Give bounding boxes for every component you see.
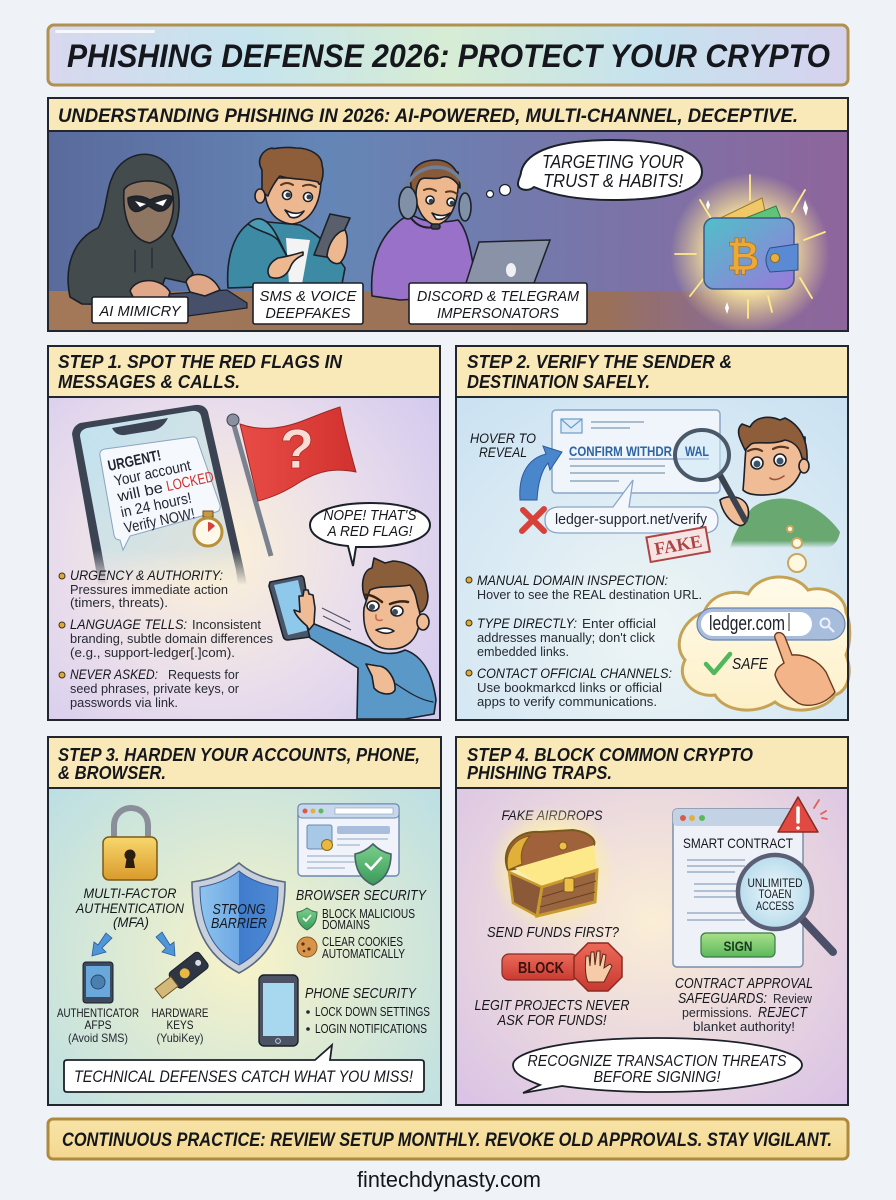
bullet: contact official channels: Use bookmarkcd links or official — [477, 680, 662, 695]
text: multi-factor authentication: AUTHENTICATION — [75, 900, 185, 916]
arrow: to hardware keys — [156, 932, 175, 956]
caption: hover to reveal: REVEAL — [479, 444, 527, 460]
speech bubble: recognize transaction threats: RECOGNIZE TRANSACTION THREATS — [528, 1053, 787, 1070]
text: multi-factor authentication: (MFA) — [113, 914, 149, 930]
icon: warning triangle — [778, 797, 827, 832]
panel heading: step 1: MESSAGES & CALLS. — [58, 372, 240, 392]
bullet: language tells: (e.g., support-ledger[.]com). — [70, 645, 235, 660]
hacker hands on keyboard — [130, 274, 220, 299]
icon: red flag with question mark — [227, 407, 356, 556]
icon: magnifying glass over contract: UNLIMITED — [748, 876, 803, 890]
message bubble on phone — [100, 437, 222, 550]
title banner: PHISHING DEFENSE 2026: PROTECT YOUR CRYPTO — [67, 38, 830, 74]
bullet: contact official channels — [466, 666, 672, 709]
message bubble on phone: in 24 hours! — [119, 490, 193, 521]
icon: strong barrier shield — [192, 863, 285, 973]
title banner — [48, 25, 848, 85]
icon: secure browser window — [298, 804, 399, 885]
email card — [552, 410, 720, 493]
text: browser security — [296, 887, 427, 961]
text: contract approval safeguards: blanket authority! — [693, 1019, 795, 1034]
text: contract approval safeguards: REJECT — [758, 1005, 808, 1021]
email card: CONFIRM WITHDR — [569, 443, 672, 459]
bullet: type directly: TYPE DIRECTLY: — [477, 616, 577, 631]
icon: smartphone — [259, 975, 298, 1046]
icon: gold padlock — [103, 808, 157, 880]
callout: technical defenses — [64, 1045, 424, 1092]
bullet: language tells: branding, subtle domain differences — [70, 631, 273, 646]
bullet: never asked — [59, 667, 240, 710]
message bubble on phone: LOCKED — [165, 469, 215, 495]
character: man blocking phone — [269, 558, 436, 719]
panel: step 3 — [48, 737, 441, 1105]
motion lines — [322, 608, 351, 630]
speech bubble: targeting your trust: TRUST & HABITS! — [543, 171, 683, 191]
panel heading: step 4: STEP 4. BLOCK COMMON CRYPTO — [467, 745, 753, 765]
panel: step 4 — [456, 737, 848, 1105]
character: young man with phone — [228, 147, 350, 288]
bullet: manual domain inspection — [466, 573, 702, 602]
bullet: type directly — [466, 616, 656, 659]
icon: magnifying glass over contract: ACCESS — [756, 899, 794, 913]
text: contract approval safeguards — [675, 976, 813, 1034]
text: browser security: DOMAINS — [322, 918, 370, 932]
label: SMS and voice deepfakes — [253, 283, 363, 324]
caption: legit projects never ask: LEGIT PROJECTS NEVER — [474, 998, 630, 1014]
text: browser security: AUTOMATICALLY — [322, 947, 406, 961]
bullet: urgency and authority: Pressures immediate action — [70, 582, 228, 597]
text: multi-factor authentication — [75, 885, 185, 930]
message bubble on phone: URGENT! — [106, 447, 163, 475]
bullet: language tells: Inconsistent — [192, 617, 261, 632]
icon: block button with stop sign: BLOCK — [518, 960, 564, 977]
icon: magnifying glass: WAL — [685, 443, 709, 459]
icon: phone with urgent message — [72, 404, 246, 584]
text: contract approval safeguards: CONTRACT APPROVAL — [675, 976, 813, 992]
label: Discord and Telegram impersonators — [409, 283, 587, 324]
text: authenticator apps: (Avoid SMS) — [68, 1031, 128, 1045]
icon: glowing crypto wallet: ₿ — [727, 235, 759, 279]
text: phone security: LOCK DOWN SETTINGS — [315, 1005, 430, 1019]
laptop — [462, 240, 550, 289]
panel heading: step 4 — [456, 737, 848, 788]
icon: block button with stop sign — [502, 943, 622, 991]
message bubble on phone: Your account — [113, 457, 193, 490]
panel heading: understanding phishing: UNDERSTANDING PHISHING IN 2026: AI-POWERED, MULTI-CHANNEL, DECEPTIVE. — [58, 106, 798, 127]
panel heading: step 4: PHISHING TRAPS. — [467, 763, 612, 783]
text: authenticator apps: AUTHENTICATOR — [57, 1006, 139, 1020]
smart contract window — [673, 809, 803, 967]
character: man with magnifying glass — [720, 417, 840, 548]
icon: glowing crypto wallet — [670, 173, 830, 333]
text: browser security: BLOCK MALICIOUS — [322, 907, 415, 921]
thought cloud: safe URL — [679, 577, 850, 710]
text: multi-factor authentication: MULTI-FACTOR — [84, 885, 176, 901]
bullet: manual domain inspection: MANUAL DOMAIN INSPECTION: — [477, 573, 668, 588]
bullet: language tells: LANGUAGE TELLS: — [70, 617, 187, 632]
speech bubble: targeting your trust — [486, 140, 702, 200]
bullet: urgency and authority — [59, 568, 228, 610]
panel heading: step 3: & BROWSER. — [58, 763, 166, 783]
thought cloud: safe URL: SAFE — [732, 656, 768, 673]
bullet: never asked: NEVER ASKED: — [70, 667, 158, 682]
speech bubble: recognize transaction threats: BEFORE SIGNING! — [594, 1069, 721, 1086]
speech bubble: nope — [310, 503, 430, 566]
bullet: never asked: Requests for — [168, 667, 240, 682]
smart contract window: SMART CONTRACT — [683, 835, 793, 851]
arrow: to authenticator apps — [92, 933, 112, 956]
bullet: never asked: passwords via link. — [70, 695, 178, 710]
bullet: type directly: addresses manually; don't click — [477, 630, 655, 645]
text: hardware keys: HARDWARE — [152, 1006, 208, 1020]
thought dots — [787, 526, 806, 572]
thought cloud: safe URL: ledger.com — [709, 613, 785, 635]
text: phone security — [305, 986, 430, 1036]
caption: legit projects never ask — [474, 998, 630, 1029]
label: AI mimicry: AI MIMICRY — [99, 303, 181, 320]
panel: step 1 — [48, 346, 440, 720]
callout: technical defenses: TECHNICAL DEFENSES CATCH WHAT YOU MISS! — [74, 1067, 413, 1086]
website credit: fintechdynasty.com — [357, 1167, 541, 1192]
panel: step 2 — [456, 346, 850, 720]
keyboard — [167, 290, 247, 316]
character: hooded hacker — [68, 154, 193, 305]
text: hardware keys: KEYS — [166, 1018, 194, 1032]
text: authenticator apps: AFPS — [84, 1018, 112, 1032]
message bubble on phone: Verify NOW! — [123, 505, 196, 537]
bullet: language tells — [59, 617, 273, 660]
URL callout — [545, 480, 718, 533]
bullet: never asked: seed phrases, private keys, or — [70, 681, 240, 696]
smart contract window: SIGN — [724, 938, 752, 954]
panel heading: step 2: DESTINATION SAFELY. — [467, 372, 650, 392]
bullet: type directly: embedded links. — [477, 644, 569, 659]
speech bubble: targeting your trust: TARGETING YOUR — [542, 152, 684, 172]
icon: authenticator tablet — [83, 962, 113, 1003]
icon: red X — [522, 509, 544, 531]
bullet: urgency and authority: (timers, threats). — [70, 595, 168, 610]
text: browser security: CLEAR COOKIES — [322, 935, 403, 949]
icon: magnifying glass — [675, 430, 745, 520]
bullet: contact official channels: CONTACT OFFICIAL CHANNELS: — [477, 666, 672, 681]
panel heading: step 3: STEP 3. HARDEN YOUR ACCOUNTS, PHONE, — [58, 745, 420, 765]
label: AI mimicry — [92, 297, 188, 323]
caption: send funds first: SEND FUNDS FIRST? — [487, 925, 620, 941]
text: phone security: LOGIN NOTIFICATIONS — [315, 1022, 427, 1036]
icon: stopwatch — [194, 511, 222, 546]
label: Discord and Telegram impersonators: IMPERSONATORS — [437, 305, 559, 322]
footer banner — [48, 1119, 848, 1159]
text: authenticator apps — [57, 1006, 139, 1045]
text: browser security: BROWSER SECURITY — [296, 887, 427, 904]
speech bubble: nope: A RED FLAG! — [327, 523, 413, 540]
label: SMS and voice deepfakes: SMS & VOICE — [260, 288, 357, 305]
stamp: fake — [646, 527, 710, 562]
icon: strong barrier shield: STRONG — [212, 902, 266, 918]
label: Discord and Telegram impersonators: DISCORD & TELEGRAM — [417, 288, 579, 305]
panel heading: step 3 — [48, 737, 441, 788]
speech bubble: nope: NOPE! THAT'S — [324, 507, 416, 524]
icon: strong barrier shield: BARRIER — [211, 916, 267, 932]
icon: magnifying glass over contract: TOAEN — [758, 887, 792, 901]
URL callout: ledger-support.net/verify — [555, 511, 707, 528]
icon: curved blue arrow — [520, 446, 562, 500]
panel heading: step 2: STEP 2. VERIFY THE SENDER & — [467, 352, 732, 372]
text: contract approval safeguards: Review — [773, 991, 813, 1006]
character: support agent with headset — [372, 160, 474, 300]
bullet: urgency and authority: URGENCY & AUTHORITY: — [70, 568, 223, 583]
bullet: type directly: Enter official — [582, 616, 656, 631]
table surface — [49, 291, 847, 330]
caption: hover to reveal: HOVER TO — [470, 430, 536, 446]
icon: glowing treasure chest — [488, 804, 616, 932]
message bubble on phone: will be — [115, 479, 164, 506]
text: phone security: PHONE SECURITY — [305, 986, 417, 1002]
stamp: fake: FAKE — [653, 531, 704, 559]
speech bubble: recognize transaction threats — [513, 1038, 802, 1093]
caption: legit projects never ask: ASK FOR FUNDS! — [497, 1013, 606, 1029]
icon: red flag with question mark: ? — [280, 417, 314, 480]
panel heading: step 1: STEP 1. SPOT THE RED FLAGS IN — [58, 352, 343, 372]
text: contract approval safeguards: SAFEGUARDS: — [678, 991, 767, 1007]
bullet: contact official channels: apps to verify communications. — [477, 694, 657, 709]
caption: fake airdrops: FAKE AIRDROPS — [502, 807, 603, 823]
icon: magnifying glass over contract — [738, 855, 833, 952]
panel heading: understanding phishing — [48, 98, 848, 131]
caption: hover to reveal — [470, 430, 536, 460]
bullet: manual domain inspection: Hover to see the REAL destination URL. — [477, 587, 702, 602]
text: contract approval safeguards: permissions. — [682, 1005, 752, 1020]
text: hardware keys: (YubiKey) — [156, 1031, 204, 1045]
panel heading: step 1 — [48, 346, 440, 397]
panel: understanding phishing — [48, 98, 848, 333]
panel heading: step 2 — [456, 346, 848, 397]
label: SMS and voice deepfakes: DEEPFAKES — [266, 305, 350, 322]
icon: hardware security key — [153, 951, 210, 1002]
text: hardware keys — [152, 1006, 208, 1045]
